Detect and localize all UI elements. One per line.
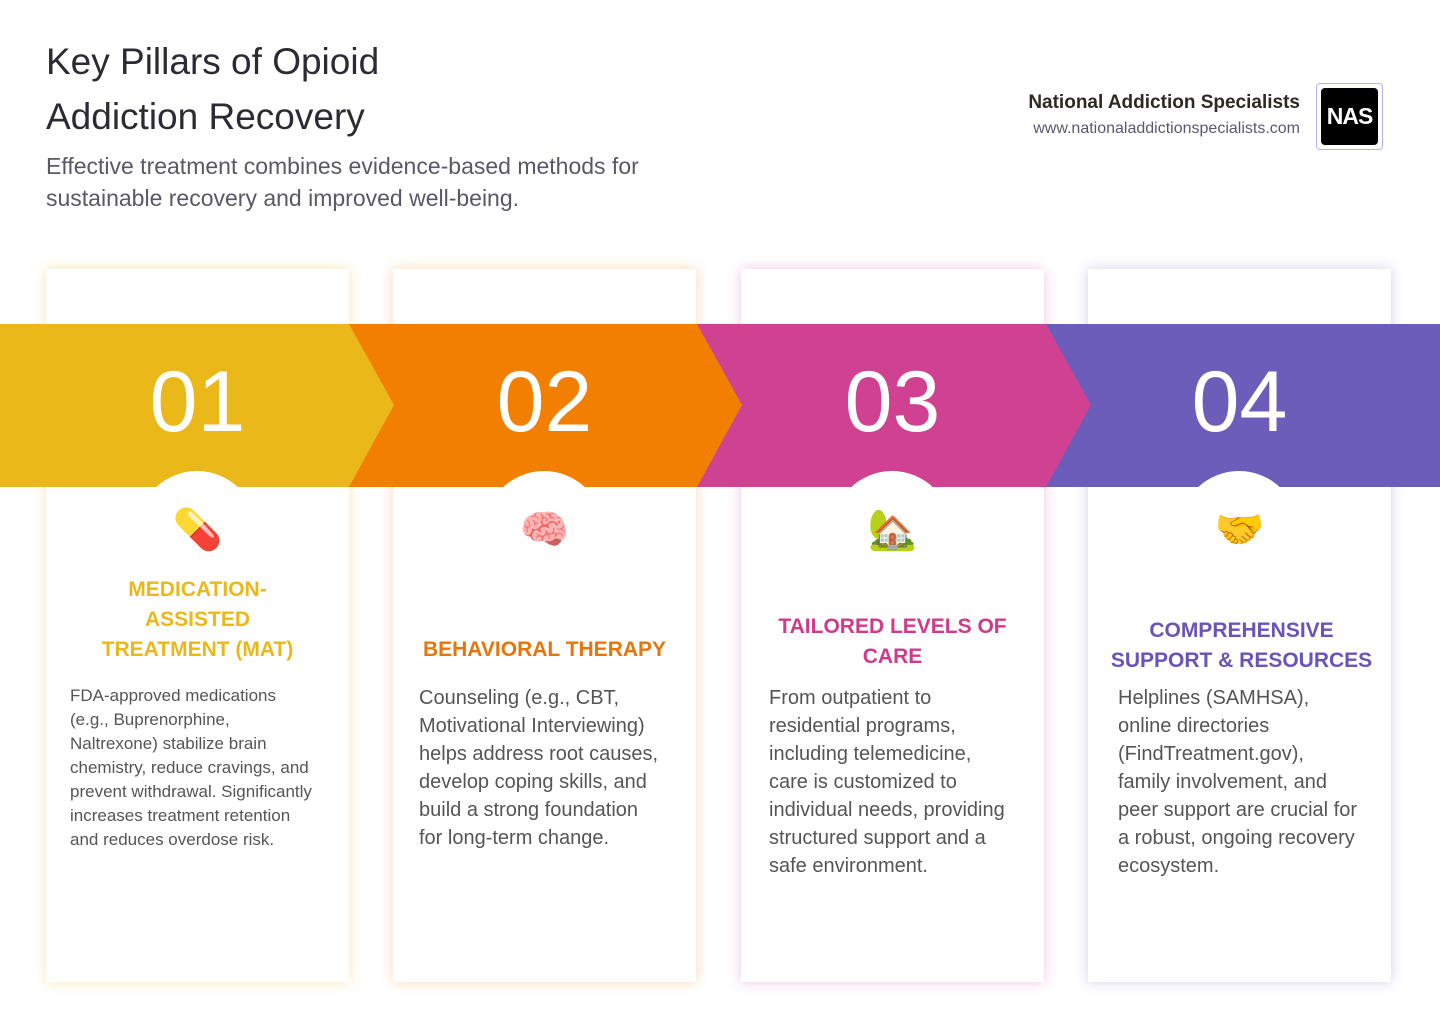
card 3 title: CARE (863, 645, 922, 668)
subtitle: sustainable recovery and improved well-being. (46, 185, 519, 211)
card 4 text: (FindTreatment.gov), (1118, 743, 1304, 765)
card 1 text (70, 686, 312, 849)
brand text (1028, 92, 1300, 137)
card 3 title (778, 615, 1007, 668)
numbers: 01 (150, 354, 245, 450)
card 2 text: for long-term change. (419, 827, 609, 849)
icon: handshake: 🤝 (1215, 508, 1264, 552)
card 3 text: care is customized to (769, 771, 957, 793)
text: 02 (497, 354, 592, 450)
logo: NAS (1327, 103, 1372, 129)
card 3 text (769, 687, 1005, 877)
card 3 text: residential programs, (769, 715, 956, 737)
card 3 text: including telemedicine, (769, 743, 971, 765)
card 2 text: Motivational Interviewing) (419, 715, 645, 737)
card 4 title: SUPPORT & RESOURCES (1111, 649, 1372, 672)
card 1 text: increases treatment retention (70, 806, 290, 825)
card 2 text: develop coping skills, and (419, 771, 647, 793)
icon: pill: 💊 (173, 508, 222, 552)
card 3 text: safe environment. (769, 855, 928, 877)
card 2 text: helps address root causes, (419, 743, 658, 765)
card 3 text: individual needs, providing (769, 799, 1005, 821)
brand text: www.nationaladdictionspecialists.com (1033, 120, 1300, 137)
card 1 title: TREATMENT (MAT) (102, 638, 293, 661)
card 1 text: chemistry, reduce cravings, and (70, 758, 309, 777)
icon: brain: 🧠 (520, 508, 569, 552)
card 2 text: Counseling (e.g., CBT, (419, 687, 619, 709)
card 1 text: (e.g., Buprenorphine, (70, 710, 230, 729)
card 4 text: ecosystem. (1118, 855, 1219, 877)
card 1 text: Naltrexone) stabilize brain (70, 734, 267, 753)
card 4 (1088, 269, 1391, 982)
card 2 (393, 269, 696, 982)
text: 04 (1192, 354, 1287, 450)
card 3 title: TAILORED LEVELS OF (778, 615, 1007, 638)
card 2 text (419, 687, 658, 849)
title: Addiction Recovery (46, 96, 365, 137)
text: 03 (845, 354, 940, 450)
icon: house: 🏡 (868, 508, 917, 552)
card 3 text: From outpatient to (769, 687, 931, 709)
card 1 (46, 269, 349, 982)
card 1 text: prevent withdrawal. Significantly (70, 782, 312, 801)
card 1 text: FDA-approved medications (70, 686, 276, 705)
card 3 text: structured support and a (769, 827, 986, 849)
card 2 title: BEHAVIORAL THERAPY (423, 638, 666, 661)
title (46, 41, 379, 137)
card 4 text: peer support are crucial for (1118, 799, 1357, 821)
card 1 text: and reduces overdose risk. (70, 830, 274, 849)
card 4 text: online directories (1118, 715, 1269, 737)
card 4 text: Helplines (SAMHSA), (1118, 687, 1309, 709)
card 3 (741, 269, 1044, 982)
card 4 title (1111, 619, 1372, 672)
brand text: National Addiction Specialists (1028, 92, 1300, 113)
card 4 text (1118, 687, 1357, 877)
logo (1316, 83, 1383, 150)
card 4 text: a robust, ongoing recovery (1118, 827, 1355, 849)
card 4 text: family involvement, and (1118, 771, 1327, 793)
card 1 title: ASSISTED (145, 608, 250, 631)
card 2 text: build a strong foundation (419, 799, 638, 821)
circles (137, 471, 257, 591)
card 1 title (102, 578, 293, 661)
title: Key Pillars of Opioid (46, 41, 379, 82)
card 1 title: MEDICATION- (128, 578, 267, 601)
card 4 title: COMPREHENSIVE (1149, 619, 1334, 642)
subtitle (46, 153, 639, 211)
chevron band (0, 324, 1440, 487)
subtitle: Effective treatment combines evidence-based methods for (46, 153, 639, 179)
